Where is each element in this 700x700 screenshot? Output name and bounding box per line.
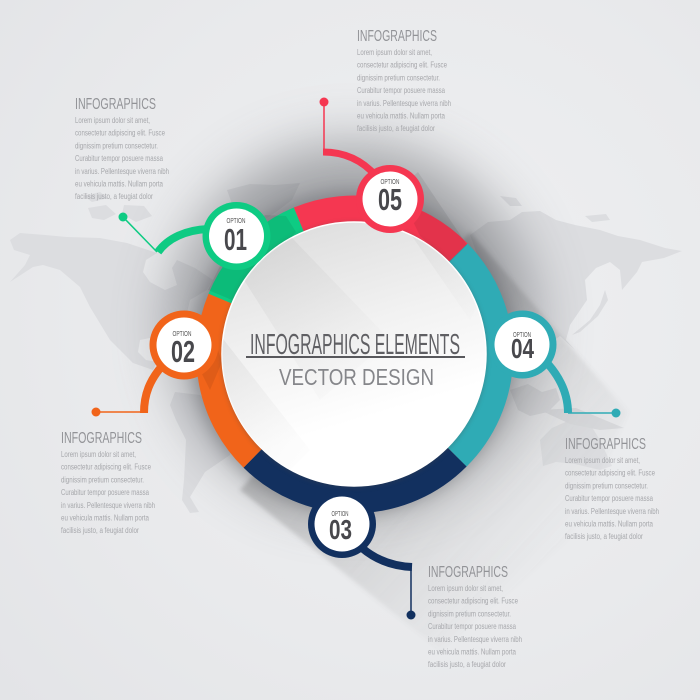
text block 04: in varius. Pellentesque viverra nibh bbox=[565, 506, 659, 516]
badge 01 bbox=[202, 202, 270, 270]
long shadows bbox=[240, 232, 628, 650]
badge 03: OPTION bbox=[332, 511, 348, 518]
badge 02: 02 bbox=[171, 334, 195, 369]
badge 04 bbox=[488, 310, 556, 378]
text block 01: eu vehicula mattis. Nullam porta bbox=[75, 178, 163, 188]
text block 03: dignissim pretium consectetur. bbox=[428, 608, 511, 618]
text block 01: consectetur adipiscing elit. Fusce bbox=[75, 128, 165, 138]
text block 02: INFOGRAPHICS bbox=[61, 430, 142, 447]
central title: VECTOR DESIGN bbox=[279, 364, 434, 390]
badge 01: 01 bbox=[224, 222, 247, 257]
text block 01: Curabitur tempor posuere massa bbox=[75, 153, 163, 163]
text block 05: eu vehicula mattis. Nullam porta bbox=[357, 110, 445, 120]
text block 05: in varius. Pellentesque viverra nibh bbox=[357, 98, 451, 108]
text block 04: dignissim pretium consectetur. bbox=[565, 480, 648, 490]
ring halo shadow bbox=[170, 143, 534, 513]
text block 03: Curabitur tempor posuere massa bbox=[428, 621, 516, 631]
text block 05: Lorem ipsum dolor sit amet, bbox=[357, 47, 432, 57]
text block 01: facilisis justo, a feugiat dolor bbox=[75, 191, 153, 201]
text block 03 bbox=[428, 564, 522, 669]
connector 04 bbox=[548, 364, 620, 418]
text block 02: consectetur adipiscing elit. Fusce bbox=[61, 462, 151, 472]
disc long shadows bbox=[222, 236, 430, 416]
ring segment: teal bbox=[457, 253, 500, 457]
text block 04: INFOGRAPHICS bbox=[565, 436, 646, 453]
text block 04: Lorem ipsum dolor sit amet, bbox=[565, 455, 640, 465]
badge 01: OPTION bbox=[226, 218, 246, 225]
text block 02 bbox=[61, 430, 155, 535]
text block 01: INFOGRAPHICS bbox=[75, 96, 156, 113]
connector 03 bbox=[362, 548, 416, 620]
badge 03 bbox=[308, 490, 376, 558]
text block 03: Lorem ipsum dolor sit amet, bbox=[428, 583, 503, 593]
badge 05 bbox=[356, 165, 424, 233]
central title bbox=[246, 329, 465, 390]
text block 04: Curabitur tempor posuere massa bbox=[565, 493, 653, 503]
text block 01 bbox=[75, 96, 169, 201]
badge 05: 05 bbox=[378, 182, 402, 217]
text block 01: Lorem ipsum dolor sit amet, bbox=[75, 115, 150, 125]
text block 05: Curabitur tempor posuere massa bbox=[357, 85, 445, 95]
text block 04: eu vehicula mattis. Nullam porta bbox=[565, 518, 653, 528]
badge 04: OPTION bbox=[513, 332, 531, 339]
text block 04: consectetur adipiscing elit. Fusce bbox=[565, 468, 655, 478]
connector 01 bbox=[118, 212, 208, 252]
text block 03: INFOGRAPHICS bbox=[428, 564, 508, 581]
world map bbox=[10, 183, 682, 513]
connector 05 bbox=[320, 98, 376, 176]
ring segment: orange bbox=[210, 299, 253, 458]
badge 03: 03 bbox=[329, 514, 352, 545]
text block 02: dignissim pretium consectetur. bbox=[61, 474, 144, 484]
badge 04: 04 bbox=[511, 333, 534, 364]
ring badge shadows bbox=[200, 172, 467, 390]
ring segment: green bbox=[221, 220, 299, 299]
text block 01: in varius. Pellentesque viverra nibh bbox=[75, 166, 169, 176]
text block 03: in varius. Pellentesque viverra nibh bbox=[428, 634, 522, 644]
text block 03: facilisis justo, a feugiat dolor bbox=[428, 659, 506, 669]
ring segment: red bbox=[299, 209, 458, 253]
text block 02: Lorem ipsum dolor sit amet, bbox=[61, 449, 136, 459]
text block 02: facilisis justo, a feugiat dolor bbox=[61, 525, 139, 535]
text block 05: consectetur adipiscing elit. Fusce bbox=[357, 60, 447, 70]
ring segment: navy bbox=[253, 457, 457, 500]
text block 02: eu vehicula mattis. Nullam porta bbox=[61, 512, 149, 522]
text block 05: facilisis justo, a feugiat dolor bbox=[357, 123, 435, 133]
central title: INFOGRAPHICS ELEMENTS bbox=[250, 329, 460, 361]
badge 02 bbox=[150, 310, 218, 380]
text block 02: in varius. Pellentesque viverra nibh bbox=[61, 500, 155, 510]
text block 05 bbox=[357, 28, 451, 133]
text block 05: dignissim pretium consectetur. bbox=[357, 72, 440, 82]
badge 05: OPTION bbox=[380, 179, 400, 186]
badge 02: OPTION bbox=[172, 331, 192, 338]
text block 04: facilisis justo, a feugiat dolor bbox=[565, 531, 643, 541]
text block 04 bbox=[565, 436, 659, 541]
ring bbox=[210, 209, 500, 500]
text block 03: eu vehicula mattis. Nullam porta bbox=[428, 646, 516, 656]
connector 02 bbox=[92, 366, 162, 416]
text block 02: Curabitur tempor posuere massa bbox=[61, 487, 149, 497]
text block 03: consectetur adipiscing elit. Fusce bbox=[428, 596, 518, 606]
text block 01: dignissim pretium consectetur. bbox=[75, 140, 158, 150]
central disc bbox=[218, 220, 488, 488]
text block 05: INFOGRAPHICS bbox=[357, 28, 437, 45]
